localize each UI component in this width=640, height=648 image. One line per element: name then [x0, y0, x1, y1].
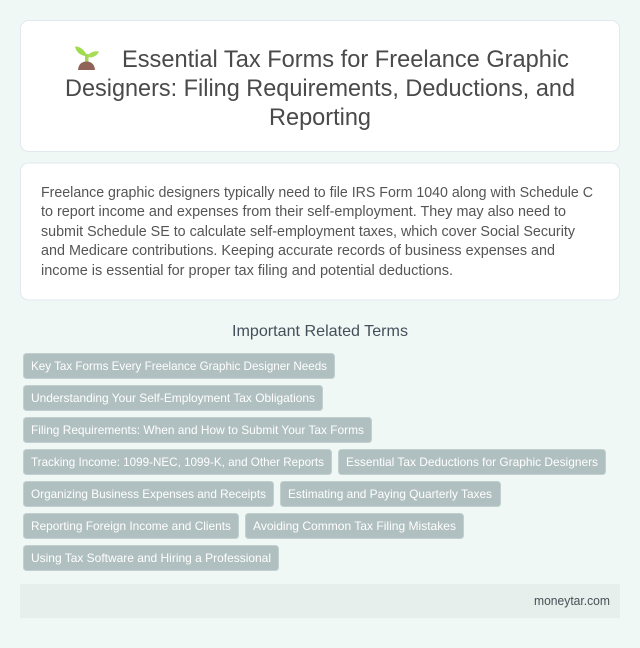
summary text: to report income and expenses from their self-employment. They may also need to: [41, 204, 566, 220]
tag: [246, 514, 464, 538]
tag: Understanding Your Self-Employment Tax Obligations: [31, 391, 315, 405]
tag: [24, 482, 274, 506]
footer: [20, 584, 620, 618]
summary text: income is essential for proper tax filing and potential deductions.: [41, 263, 453, 279]
tag: Tracking Income: 1099-NEC, 1099-K, and Other Reports: [31, 455, 324, 469]
tag: Essential Tax Deductions for Graphic Designers: [346, 455, 598, 469]
footer: moneytar.com: [534, 593, 610, 608]
tag: Key Tax Forms Every Freelance Graphic Designer Needs: [31, 359, 327, 373]
tag: [280, 482, 500, 506]
title: [65, 46, 575, 131]
tag: [24, 514, 238, 538]
tag: Reporting Foreign Income and Clients: [31, 519, 231, 533]
panel: related term tags: [24, 354, 606, 570]
tag: Estimating and Paying Quarterly Taxes: [288, 487, 492, 501]
tag: [24, 386, 322, 410]
tag: Using Tax Software and Hiring a Professional: [31, 551, 271, 565]
heading: related terms: Important Related Terms: [232, 323, 408, 340]
tag: [24, 546, 278, 570]
panel: header card: [20, 20, 620, 152]
title: Designers: Filing Requirements, Deductions, and: [65, 75, 575, 102]
tag: Avoiding Common Tax Filing Mistakes: [253, 519, 456, 533]
summary text: [41, 185, 593, 279]
summary text: and Medicare contributions. Keeping accurate records of business expenses and: [41, 243, 555, 259]
tag: Organizing Business Expenses and Receipts: [31, 487, 266, 501]
tag: [338, 450, 606, 474]
tag: [24, 418, 372, 442]
tag: [24, 450, 332, 474]
summary text: submit Schedule SE to calculate self-employment taxes, which cover Social Security: [41, 224, 576, 240]
panel: summary card: [20, 163, 620, 300]
title: Reporting: [269, 104, 371, 131]
title: Essential Tax Forms for Freelance Graphic: [122, 46, 569, 73]
tag: [24, 354, 334, 378]
summary text: Freelance graphic designers typically need to file IRS Form 1040 along with Schedule C: [41, 185, 593, 201]
tag: Filing Requirements: When and How to Submit Your Tax Forms: [31, 423, 364, 437]
icon: sprout: [75, 46, 99, 70]
